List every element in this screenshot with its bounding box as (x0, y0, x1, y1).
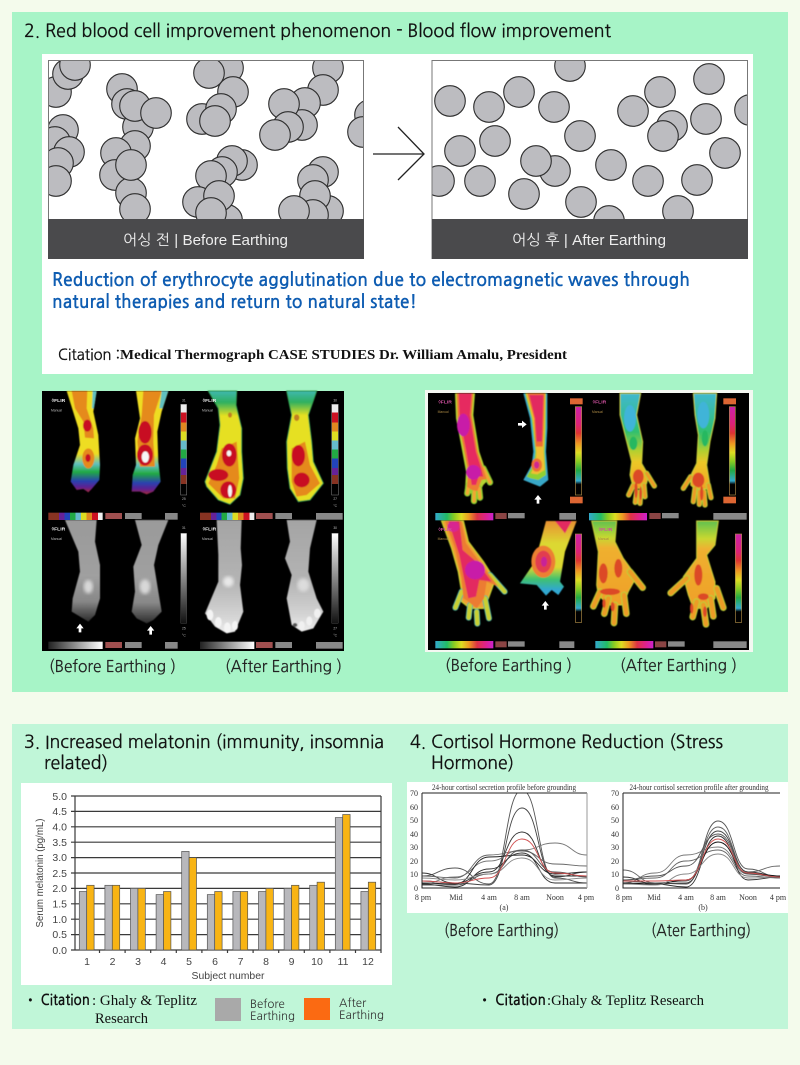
heading: cortisol reduction (410, 733, 723, 772)
legend: before earthing: Earthing (250, 1010, 295, 1022)
x axis labels: 1 (84, 956, 90, 968)
line chart: cortisol after: 20 (611, 857, 619, 866)
foot 4 colour (287, 391, 323, 502)
y axis labels: 5.0 (52, 791, 67, 803)
FLIR labels on hands: ◊FLIR (599, 527, 613, 533)
label: before earthing: 어싱 전 | Before Earthing (123, 232, 288, 249)
line chart: cortisol before (410, 783, 595, 912)
citation: medical thermograph: Medical Thermograph CASE STUDIES Dr. William Amalu, President (120, 347, 568, 362)
line chart: cortisol before: (a) (500, 903, 509, 912)
foot 6 gray (132, 520, 168, 623)
FLIR labels: Manual (202, 408, 213, 412)
heading: increased melatonin (24, 733, 384, 772)
FLIR labels on hands: Manual (438, 410, 449, 414)
FLIR labels on hands: Manual (598, 537, 609, 541)
x axis labels: 4 (161, 956, 167, 968)
y axis title: Serum melatonin (pg/mL) (34, 818, 46, 928)
arm 3 colour (620, 393, 654, 503)
FLIR labels (51, 398, 338, 637)
line chart: cortisol before: 8 am (514, 893, 531, 902)
line chart: cortisol before: 4 pm (578, 893, 595, 902)
white card: cell diagrams (40, 50, 765, 374)
heading: cortisol reduction: Hormone) (431, 754, 514, 772)
line chart: cortisol after: 60 (611, 803, 619, 812)
y axis labels: 2.0 (52, 883, 67, 895)
citation: melatonin: Research (95, 1011, 149, 1027)
FLIR labels: 27 (333, 626, 337, 630)
FLIR labels: ◊FLIR (52, 527, 66, 533)
x axis labels: 8 (263, 956, 269, 968)
x axis labels: 7 (238, 956, 244, 968)
x axis labels: 11 (338, 956, 349, 968)
FLIR labels: °C (333, 504, 338, 508)
line chart: cortisol after: 0 (615, 884, 619, 893)
FLIR labels: ◊FLIR (203, 398, 217, 404)
citation: cortisol: • Citation (478, 993, 546, 1008)
thermal image: feet before and after (42, 391, 344, 651)
y axis labels: 3.0 (52, 852, 67, 864)
legend: after earthing: After (339, 997, 367, 1009)
y axis labels: 1.0 (52, 914, 67, 926)
line chart: cortisol after: Noon (739, 893, 757, 902)
y axis labels: 0.0 (52, 945, 67, 957)
arm 2 colour (523, 393, 548, 487)
scale bars (48, 404, 343, 649)
x axis labels: 6 (212, 956, 218, 968)
citation: melatonin (24, 993, 198, 1027)
foot 8 gray (285, 520, 323, 632)
foot 1 colour (67, 391, 100, 492)
line chart: cortisol before: 8 pm (415, 893, 432, 902)
y axis labels: 2.5 (52, 868, 67, 880)
line chart: cortisol before: 4 am (481, 893, 498, 902)
line chart: cortisol after: 10 (611, 870, 619, 879)
white arrows on hands (518, 421, 549, 610)
y axis labels: 4.5 (52, 806, 67, 818)
y axis labels: 1.5 (52, 898, 67, 910)
y axis labels: 4.0 (52, 822, 67, 834)
line chart: cortisol before: 60 (410, 803, 418, 812)
line chart: cortisol before: 20 (410, 857, 418, 866)
legend: before earthing (215, 998, 295, 1022)
x axis labels: 5 (186, 956, 192, 968)
line chart: cortisol after: 24-hour cortisol secretion profile after grounding (630, 783, 768, 792)
hand 8 colour (671, 521, 723, 624)
heading: cortisol reduction: 4. Cortisol Hormone Reduction (Stress (410, 733, 723, 751)
heading: red blood cell improvement: 2. Red blood cell improvement phenomenon - Blood flow improvement (24, 22, 611, 40)
FLIR labels: 30 (333, 398, 337, 402)
line chart: cortisol before: 70 (410, 789, 418, 798)
diagram: before earthing cells (48, 60, 364, 259)
legend: before earthing: Before (250, 998, 285, 1010)
FLIR labels: ◊FLIR (203, 527, 217, 533)
line chart: cortisol after: 4 am (678, 893, 695, 902)
y axis labels (52, 791, 67, 957)
x axis labels: 12 (362, 956, 374, 968)
text: blue explanation: natural therapies and return to natural state! (52, 293, 417, 311)
foot 7 gray (205, 520, 243, 633)
line chart: cortisol before: 0 (414, 884, 418, 893)
y axis labels: 0.5 (52, 929, 67, 941)
caption: hands before: (Before Earthing ) (445, 657, 572, 674)
FLIR labels: °C (182, 504, 186, 508)
panel: melatonin and cortisol (12, 724, 788, 1029)
hand 1 colour (455, 393, 490, 501)
FLIR labels: °C (333, 633, 338, 637)
hand 5 colour (442, 521, 505, 624)
bars: before earthing (79, 818, 368, 950)
x axis labels: 10 (311, 956, 323, 968)
FLIR labels: Manual (51, 537, 62, 541)
FLIR labels: ◊FLIR (52, 398, 66, 404)
line chart: cortisol after: Mid (647, 893, 661, 902)
x axis labels (84, 956, 374, 968)
x axis labels: 9 (289, 956, 295, 968)
FLIR labels on hands (438, 399, 613, 541)
arm 4 colour (683, 393, 717, 505)
x axis labels: 3 (135, 956, 141, 968)
line chart: cortisol before: Mid (449, 893, 463, 902)
x axis title: Subject number (192, 970, 265, 982)
FLIR labels: 25 (182, 626, 186, 630)
citation: melatonin: • Citation (24, 993, 90, 1008)
white arrows on feet (76, 624, 154, 635)
line chart: cortisol after (611, 783, 787, 912)
caption: hands after: (After Earthing ) (620, 657, 737, 674)
hand scale bars (435, 398, 747, 648)
FLIR labels: °C (182, 633, 186, 637)
FLIR labels: 31 (182, 526, 186, 530)
caption: cortisol before: (Before Earthing) (444, 922, 559, 939)
legend: after earthing: Earthing (339, 1009, 384, 1021)
citation: cortisol (478, 993, 705, 1009)
FLIR labels on hands: Manual (438, 537, 449, 541)
hand 6 colour (520, 521, 577, 596)
FLIR labels: 31 (182, 398, 186, 402)
line chart: cortisol after: 8 pm (616, 893, 633, 902)
line chart: cortisol after: 70 (611, 789, 619, 798)
line chart: cortisol after: 50 (611, 816, 619, 825)
FLIR labels on hands: ◊FLIR (593, 399, 607, 405)
x axis labels: 2 (110, 956, 116, 968)
FLIR labels on hands: Manual (592, 410, 603, 414)
line chart: cortisol after: 4 pm (770, 893, 787, 902)
FLIR labels: Manual (51, 408, 62, 412)
y axis labels: 3.5 (52, 837, 67, 849)
text: blue explanation: Reduction of erythrocyte agglutination due to electromagnetic waves through (52, 271, 690, 289)
bars: after earthing (87, 814, 376, 950)
line chart: cortisol before: 10 (410, 870, 418, 879)
citation: melatonin: : Ghaly & Teplitz (92, 993, 198, 1009)
citation: cortisol: :Ghaly & Teplitz Research (547, 993, 705, 1009)
caption: cortisol after: (Ater Earthing) (651, 922, 751, 939)
line chart: cortisol after: 8 am (710, 893, 727, 902)
line chart: cortisol after: 30 (611, 843, 619, 852)
foot 5 gray (65, 520, 100, 622)
caption: feet after: (After Earthing ) (225, 658, 342, 675)
foot 2 colour (132, 391, 168, 494)
heading: increased melatonin: related) (44, 754, 108, 772)
panel: red blood cell improvement (12, 12, 788, 692)
line chart: cortisol before: 30 (410, 843, 418, 852)
foot 3 colour (205, 391, 243, 504)
diagram: after earthing cells (432, 60, 748, 259)
FLIR labels on hands: ◊FLIR (438, 399, 452, 405)
thermal image: arms and hands before and after (425, 390, 753, 652)
cortisol charts (407, 782, 788, 913)
FLIR labels: Manual (202, 537, 213, 541)
heading: increased melatonin: 3. Increased melatonin (immunity, insomnia (24, 733, 384, 751)
legend: after earthing (304, 997, 384, 1021)
line chart: cortisol after: (b) (698, 903, 708, 912)
label: after earthing: 어싱 후 | After Earthing (512, 232, 666, 249)
citation: medical thermograph: Citation : (58, 348, 120, 363)
text: blue explanation (52, 271, 690, 311)
line chart: cortisol before: Noon (546, 893, 564, 902)
hand 7 colour (592, 521, 643, 623)
FLIR labels: 27 (333, 497, 337, 501)
FLIR labels on hands: ◊FLIR (438, 527, 452, 533)
arrow: before to after (373, 127, 424, 180)
FLIR labels: 25 (182, 497, 186, 501)
line chart: cortisol after: 40 (611, 830, 619, 839)
line chart: cortisol before: 24-hour cortisol secretion profile before grounding (432, 783, 576, 792)
caption: feet before: (Before Earthing ) (49, 658, 176, 675)
FLIR labels: 30 (333, 526, 337, 530)
line chart: cortisol before: 50 (410, 816, 418, 825)
bar chart: serum melatonin (21, 783, 392, 985)
line chart: cortisol before: 40 (410, 830, 418, 839)
